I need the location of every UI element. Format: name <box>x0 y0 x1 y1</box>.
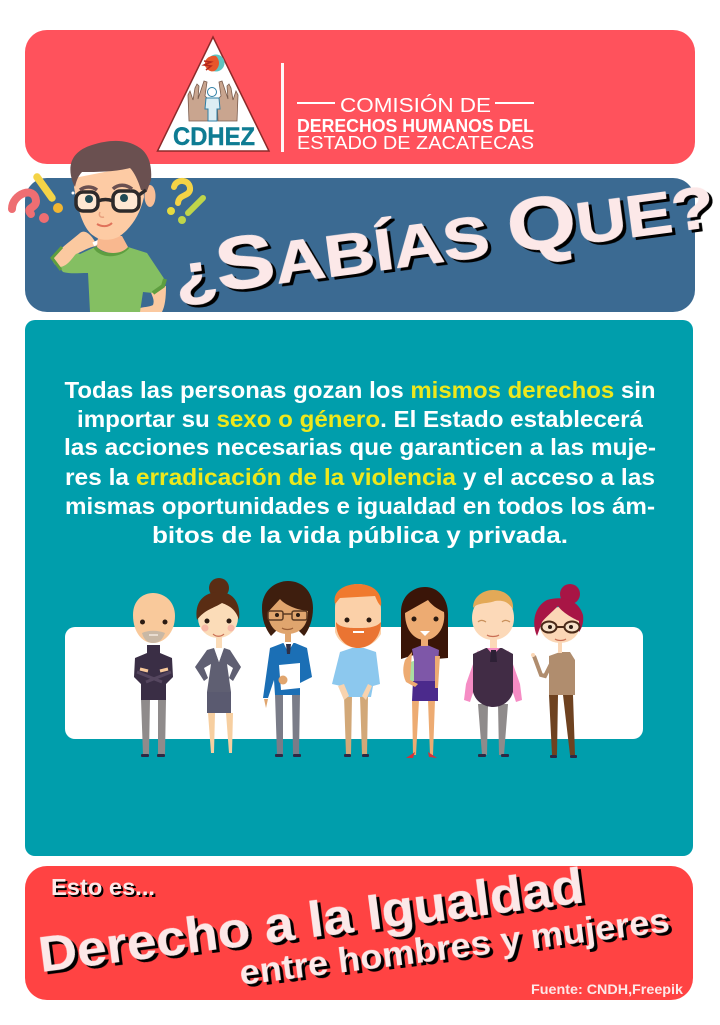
organisation name: COMISIÓN DE <box>340 94 491 117</box>
face <box>74 165 144 240</box>
icon: CDHEZ logo <box>158 37 269 151</box>
illustration: group of seven people <box>133 578 583 758</box>
person 6: blond man with vest <box>464 590 522 757</box>
panel: main content <box>25 320 693 856</box>
text block: rights statement: res la erradicación de la violencia y el acceso a las <box>65 464 655 490</box>
shirt <box>52 247 165 312</box>
heading: derecho a la igualdad: Derecho a la Igualdad <box>35 858 587 983</box>
icon: red question mark <box>12 193 36 214</box>
icon: yellow question mark <box>174 181 190 203</box>
organisation name: DERECHOS HUMANOS DEL <box>297 116 534 136</box>
text block: rights statement: importar su sexo o género . El Estado establecerá <box>77 406 643 432</box>
illustration: thinking man <box>12 141 203 312</box>
glasses <box>76 190 146 211</box>
person 7: woman with red hair and glasses <box>531 584 583 758</box>
person 1: bald man <box>133 593 175 757</box>
text block: rights statement: bitos de la vida pública y privada. <box>152 522 568 548</box>
brows and mouth <box>80 185 132 190</box>
text: esto es: Esto es... <box>51 874 155 900</box>
icon: yellow exclamation <box>37 177 52 198</box>
text block: rights statement: Todas las personas gozan los mismos derechos sin <box>64 377 656 403</box>
panel: footer <box>25 866 693 1000</box>
organisation name: ESTADO DE ZACATECAS <box>297 132 534 153</box>
person 4: bearded man in blue shirt <box>332 584 381 757</box>
text block: rights statement: mismas oportunidades e igualdad en todos los ám- <box>65 493 655 519</box>
text block: rights statement <box>64 377 656 548</box>
hair <box>70 141 151 191</box>
panel: question banner <box>25 178 695 312</box>
subheading: entre hombres y mujeres: entre hombres y mujeres <box>237 901 672 993</box>
person 2: woman in grey suit <box>195 578 241 753</box>
far arm hand <box>133 286 166 312</box>
neck <box>97 236 128 253</box>
icon: CDHEZ logo: CDHEZ <box>173 123 255 151</box>
organisation name <box>297 94 534 153</box>
icon: green exclamation <box>188 198 203 213</box>
text block: rights statement: las acciones necesarias que garanticen a las muje- <box>64 434 656 460</box>
hand on chin <box>53 232 97 267</box>
heading: sabías que: ¿SABÍAS QUE? <box>168 160 718 313</box>
panel: header <box>25 30 695 164</box>
person 3: man with blue sweater and book <box>262 581 313 757</box>
ear <box>144 185 156 207</box>
person 5: woman in purple <box>401 587 448 758</box>
source credit: Fuente: CNDH,Freepik <box>531 981 683 997</box>
divider <box>281 63 284 152</box>
white strip behind people <box>65 627 643 739</box>
